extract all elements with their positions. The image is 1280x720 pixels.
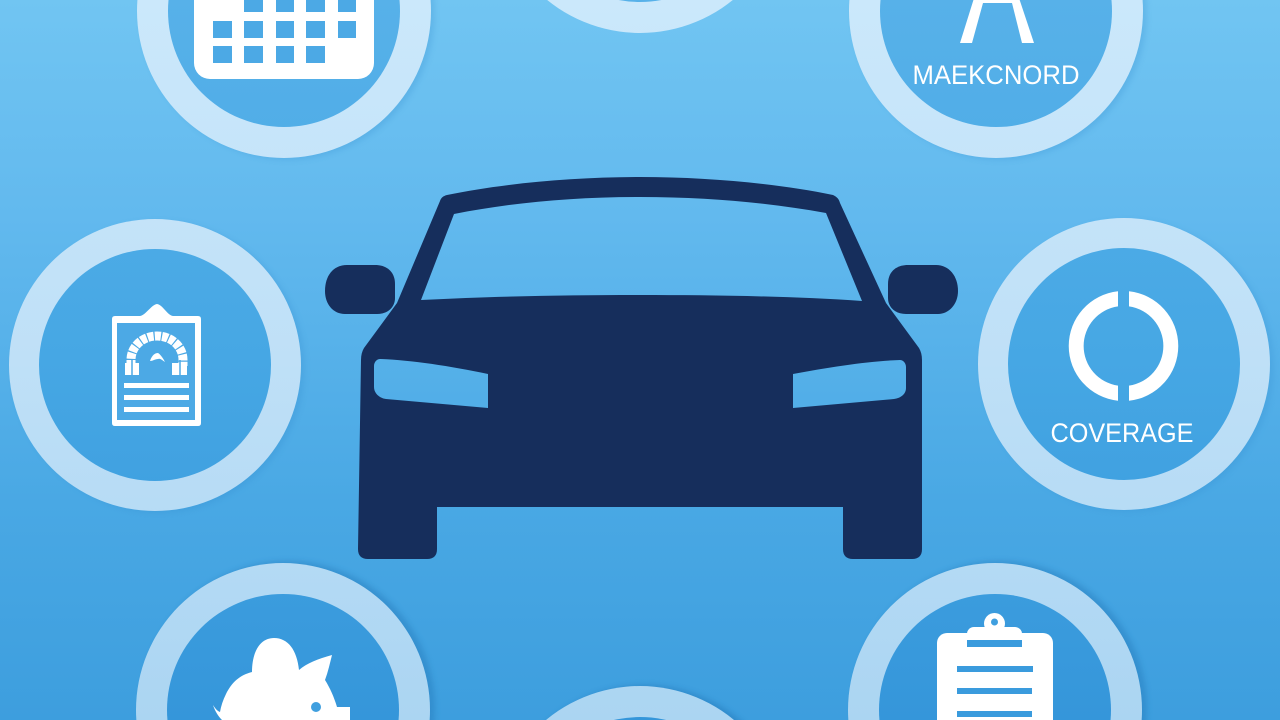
badge: calendar <box>137 0 435 160</box>
icon: clipboard <box>937 613 1053 720</box>
badge: keyword <box>849 0 1147 160</box>
icon: calendar <box>194 0 374 79</box>
icon: split ring <box>1069 291 1178 401</box>
label: coverage: COVERAGE <box>1050 418 1194 448</box>
badge: top center <box>493 0 787 33</box>
icon: clipboard with gauge <box>112 304 201 426</box>
right mirror <box>888 265 958 314</box>
badge: piggy bank <box>136 561 435 720</box>
left mirror <box>325 265 395 314</box>
icon: piggy eye <box>311 702 321 712</box>
icon: piggy bank <box>213 638 350 720</box>
badge: checklist <box>848 561 1147 720</box>
label: keyword: MAEKCNORD <box>912 60 1080 90</box>
car <box>325 177 958 559</box>
badge: coverage <box>978 218 1274 512</box>
badge: bottom center <box>493 685 792 720</box>
car body <box>358 177 922 559</box>
icon: letter A <box>960 0 1034 43</box>
badge: report <box>9 219 305 513</box>
